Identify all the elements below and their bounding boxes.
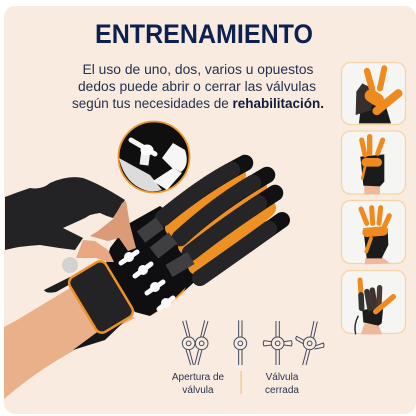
icon: open valve right (195, 320, 208, 365)
text block: description: según tus necesidades de rehabilitación. (72, 96, 324, 111)
label: open valve (172, 372, 225, 396)
divider (240, 371, 242, 394)
icon: open valve left (182, 320, 195, 365)
white valves (121, 252, 173, 309)
arm (4, 288, 135, 399)
title: ENTRENAMIENTO (95, 19, 313, 49)
icon: closed valve left (263, 321, 292, 365)
text block: description: El uso de uno, dos, varios u opuestos (82, 62, 314, 77)
label: open valve: Apertura de (172, 372, 225, 383)
icon: neutral valve (234, 320, 247, 365)
thumbnail: gesture 1 (342, 62, 406, 124)
label: closed valve: cerrada (265, 385, 299, 396)
grey sleeves (141, 223, 191, 271)
text block: description (72, 62, 324, 111)
control pad (67, 259, 135, 335)
illustration: arm and robotic glove (4, 163, 282, 399)
silver buckle (62, 257, 78, 273)
gloved hand (5, 177, 125, 250)
text block: description: dedos puede abrir o cerrar las válvulas (78, 79, 316, 94)
inset: valve close-up (118, 122, 190, 192)
thumbnail: gesture 4 (342, 270, 406, 334)
orange finger panels (173, 175, 267, 266)
thumb (76, 240, 114, 262)
thumbnail: gesture 2 (342, 131, 406, 194)
fingers (90, 201, 136, 251)
thumbnail: gesture 3 (342, 200, 406, 264)
glove base (105, 206, 205, 316)
wrist strap (73, 318, 128, 350)
label: closed valve: Válvula (266, 372, 299, 383)
finger tubes (163, 163, 282, 278)
icon: closed valve right (296, 321, 324, 365)
icons: open and closed valves (182, 320, 324, 365)
label: closed valve (265, 372, 299, 396)
label: open valve: válvula (182, 385, 214, 396)
